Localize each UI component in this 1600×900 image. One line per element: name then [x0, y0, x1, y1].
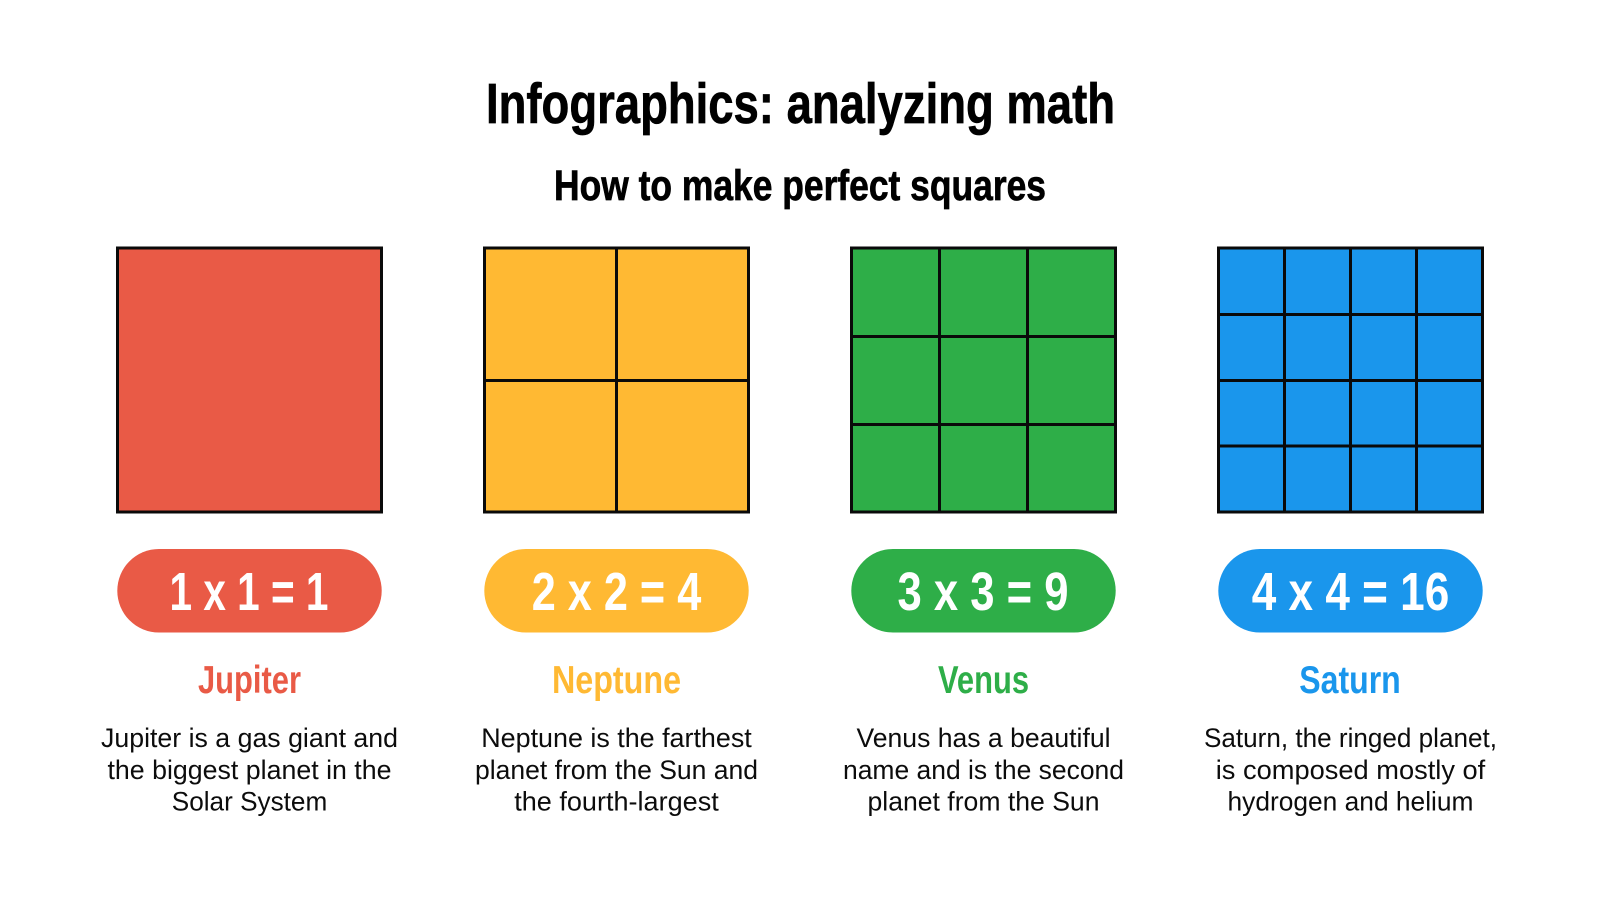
- panel: Neptune: [475, 248, 758, 816]
- description: Neptune: the fourth-largest: [514, 786, 719, 816]
- panel: Venus: [843, 248, 1124, 816]
- heading: Neptune: Neptune: [552, 659, 681, 702]
- equation pill: 1 x 1 = 1: 1 x 1 = 1: [170, 562, 328, 622]
- description: Jupiter: [101, 723, 398, 816]
- description: Neptune: Neptune is the farthest: [481, 723, 752, 753]
- description: Venus: planet from the Sun: [868, 786, 1100, 816]
- equation pill: 1 x 1 = 1: [117, 549, 382, 632]
- equation pill: 2 x 2 = 4: 2 x 2 = 4: [532, 562, 701, 622]
- equation pill: 3 x 3 = 9: 3 x 3 = 9: [898, 562, 1068, 622]
- square grid: 1 x 1: [118, 248, 382, 512]
- title: Infographics: analyzing math: [486, 72, 1115, 136]
- heading: Saturn: Saturn: [1299, 659, 1401, 702]
- heading: Jupiter: Jupiter: [198, 659, 301, 702]
- description: Jupiter: the biggest planet in the: [108, 755, 392, 785]
- equation pill: 2 x 2 = 4: [484, 549, 749, 632]
- panel: Saturn: [1204, 248, 1497, 816]
- description: Saturn: [1204, 723, 1497, 816]
- description: Neptune: [475, 723, 758, 816]
- description: Saturn: Saturn, the ringed planet,: [1204, 723, 1497, 753]
- description: Venus: [843, 723, 1124, 816]
- heading: Venus: Venus: [938, 659, 1029, 702]
- equation pill: 4 x 4 = 16: [1218, 549, 1483, 632]
- panel: Jupiter: [101, 248, 398, 816]
- description: Venus: name and is the second: [843, 755, 1124, 785]
- description: Neptune: planet from the Sun and: [475, 755, 758, 785]
- description: Saturn: is composed mostly of: [1216, 755, 1486, 785]
- equation pill: 4 x 4 = 16: 4 x 4 = 16: [1252, 562, 1449, 622]
- description: Jupiter: Solar System: [172, 786, 327, 816]
- subtitle: How to make perfect squares: [554, 162, 1046, 210]
- square grid: 2 x 2: [484, 248, 748, 512]
- description: Jupiter: Jupiter is a gas giant and: [101, 723, 398, 753]
- description: Venus: Venus has a beautiful: [856, 723, 1110, 753]
- equation pill: 3 x 3 = 9: [851, 549, 1116, 632]
- square grid: 4 x 4: [1218, 248, 1482, 512]
- description: Saturn: hydrogen and helium: [1228, 786, 1474, 816]
- square grid: 3 x 3: [852, 248, 1116, 512]
